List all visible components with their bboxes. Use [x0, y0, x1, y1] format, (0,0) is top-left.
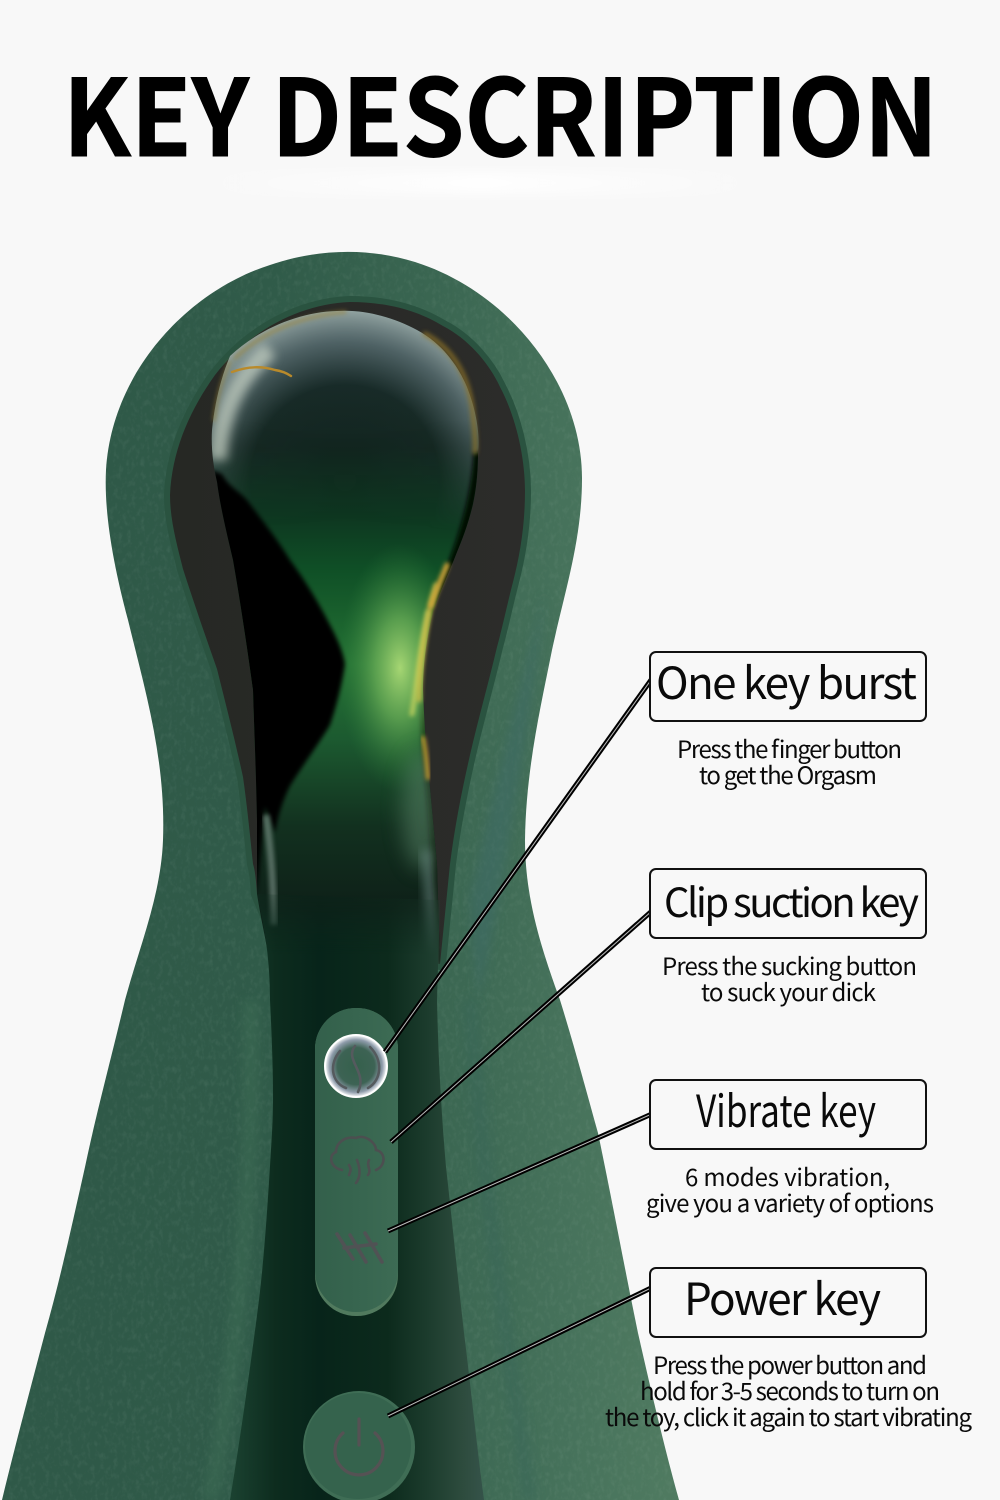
product illustration: [0, 250, 690, 1500]
callout: clip suction key: Clip suction key: [664, 871, 919, 929]
pale lower right edge: [426, 850, 434, 990]
device body: [2, 252, 679, 1500]
callout: power key: hold for 3-5 seconds to turn on: [640, 1372, 940, 1407]
dark edge: [425, 452, 478, 964]
icon: vibrate zigzags: [337, 1233, 382, 1262]
callout: clip suction key: Press the sucking button: [662, 947, 917, 982]
callout line: power: [388, 1288, 651, 1416]
control pill: [315, 1008, 398, 1316]
callout line: one key burst: [385, 680, 651, 1052]
callout: power key: Power key: [684, 1264, 881, 1328]
callout: vibrate key: Vibrate key: [696, 1076, 876, 1140]
callout: power key: Press the power button and: [653, 1346, 927, 1381]
black reflection: [212, 470, 345, 894]
callout: clip suction key: [650, 869, 926, 1008]
callout line: clip suction: [391, 902, 662, 1142]
gold glint: [232, 367, 291, 376]
yellow edge reflection: [214, 312, 475, 778]
callout: one key burst: Press the finger button: [677, 730, 902, 765]
dome reflection: [212, 310, 479, 506]
callout: vibrate key: 6 modes vibration,: [685, 1158, 890, 1193]
glass dome: [212, 310, 479, 964]
icon: burst button ring: [325, 1035, 387, 1097]
lower right sheen: [402, 750, 442, 870]
icon: power: [335, 1419, 383, 1475]
callout: vibrate key: give you a variety of options: [646, 1184, 934, 1219]
power button: [303, 1391, 415, 1500]
callout: clip suction key: to suck your dick: [701, 973, 876, 1008]
body leather grain: [0, 250, 690, 1500]
callout: one key burst: to get the Orgasm: [699, 756, 877, 791]
title: KEY DESCRIPTION: [63, 33, 938, 187]
central shaft: [230, 894, 484, 1500]
callout: one key burst: [650, 648, 926, 791]
pale lower left sliver: [266, 815, 274, 925]
left pale highlight: [218, 350, 270, 460]
callout line: vibrate: [388, 1113, 654, 1231]
icon: suction cloud: [331, 1137, 384, 1183]
callout: vibrate key: [646, 1076, 934, 1219]
green glow: [351, 557, 442, 778]
callout: power key: [605, 1264, 972, 1433]
callout: power key: the toy, click it again to start vibrating: [605, 1398, 972, 1433]
callout: one key burst: One key burst: [656, 648, 917, 712]
opening rim and black recess: [170, 302, 525, 964]
gold top reflection: [235, 312, 345, 358]
